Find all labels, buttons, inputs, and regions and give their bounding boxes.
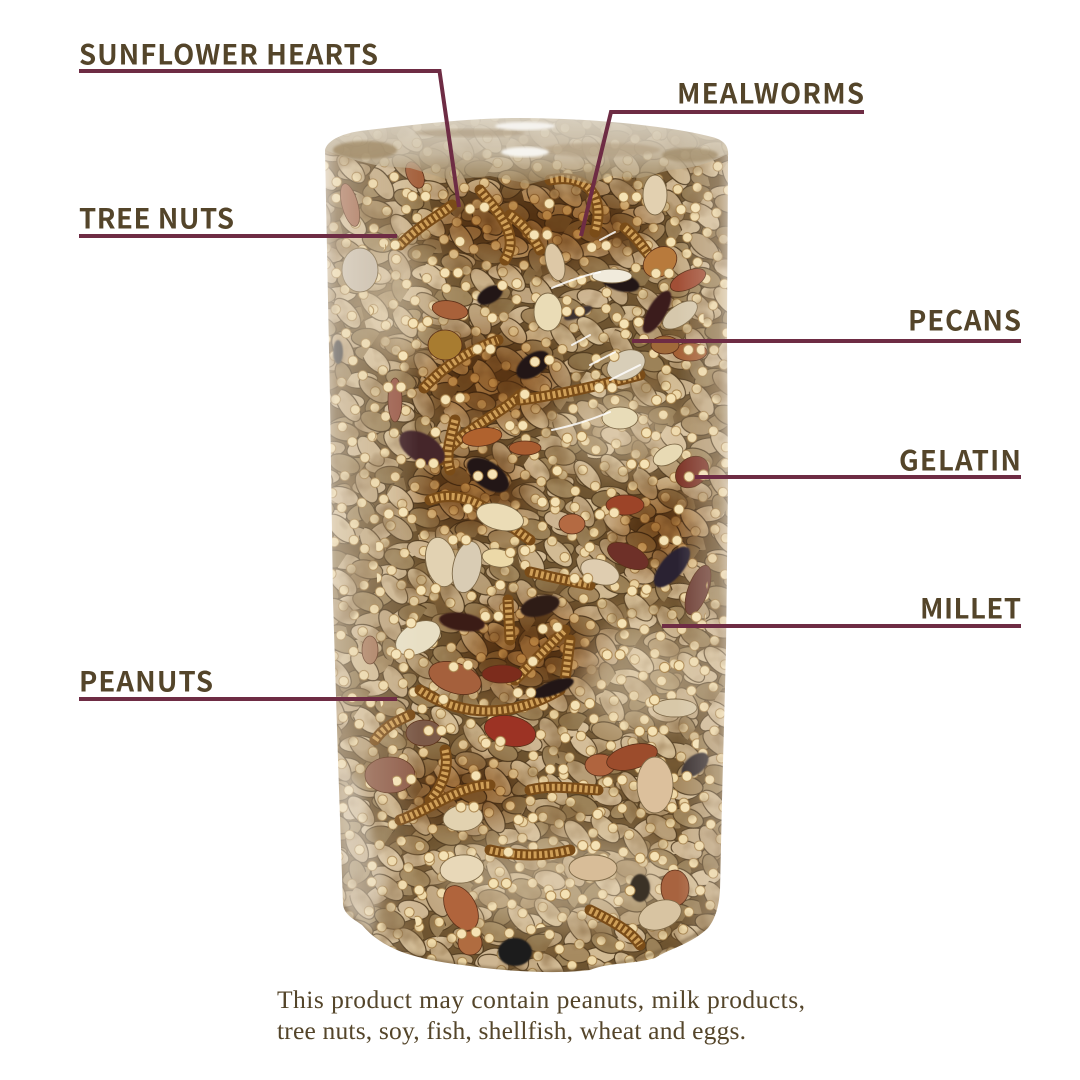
allergen note: tree nuts, soy, fish, shellfish, wheat and eggs. <box>277 1016 746 1045</box>
pale whole seeds <box>342 175 702 936</box>
red-brown nuts <box>337 159 716 955</box>
allergen note <box>277 985 805 1045</box>
glossy highlights <box>552 232 640 430</box>
callout: mealworms: MEALWORMS <box>677 72 864 112</box>
pale sunflower zones <box>355 240 700 925</box>
callout: mealworms <box>581 72 864 236</box>
dark fruit pieces <box>333 268 713 966</box>
callout: tree nuts: TREE NUTS <box>79 196 234 236</box>
callout: sunflower hearts <box>79 32 459 207</box>
bottom wrap edge <box>343 905 708 972</box>
callout: peanuts: PEANUTS <box>79 660 213 700</box>
top face detail <box>333 122 718 162</box>
callout: gelatin: GELATIN <box>899 438 1021 478</box>
callout: sunflower hearts: SUNFLOWER HEARTS <box>79 32 378 72</box>
amber gelatin tint <box>400 187 705 820</box>
callout: millet: MILLET <box>920 586 1021 626</box>
allergen note: This product may contain peanuts, milk products, <box>277 985 805 1014</box>
callout: pecans: PECANS <box>908 298 1021 338</box>
worms <box>375 179 660 945</box>
top face under plastic <box>328 118 728 184</box>
plastic wrap haze at sides <box>320 110 735 980</box>
product: seed cylinder <box>320 110 735 980</box>
